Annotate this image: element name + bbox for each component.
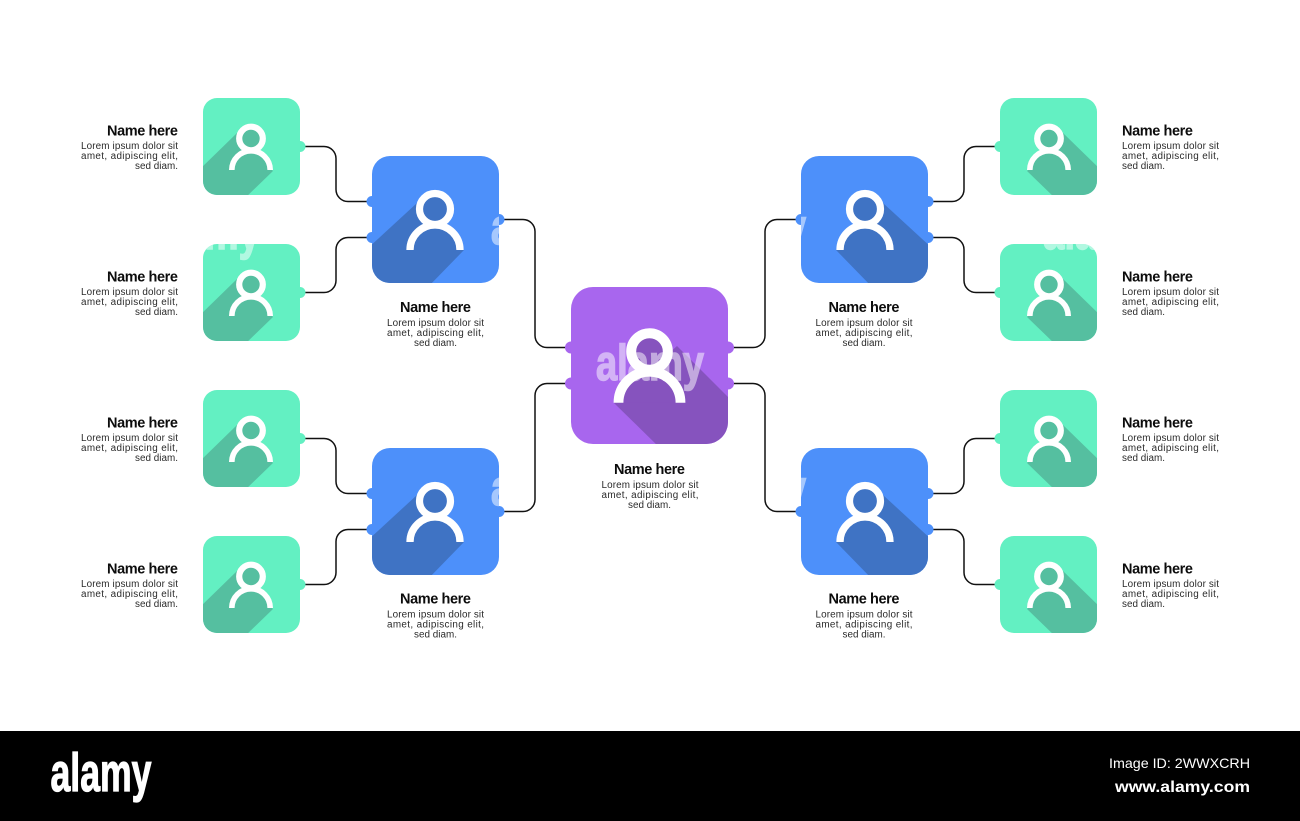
- text block: right 2: Lorem ipsum dolor sit: [1122, 287, 1219, 298]
- panel: left green box 1: [198, 98, 306, 200]
- text block: right blue top: amet, adipiscing elit,: [816, 328, 912, 339]
- text block: left 2: sed diam.: [135, 307, 178, 318]
- footer bar: [0, 731, 1300, 821]
- icon: person: [1030, 273, 1068, 316]
- watermark fragments: alamy: [1043, 204, 1152, 260]
- text block: left 3: Name here: [107, 416, 178, 432]
- text block: left 3: amet, adipiscing elit,: [81, 443, 178, 454]
- text block: left 2: [81, 270, 178, 318]
- text block: right 3: [1122, 416, 1219, 464]
- panel: right blue box top: [796, 156, 934, 288]
- icon: person: [840, 194, 890, 250]
- text block: left blue bottom: Name here: [400, 592, 471, 608]
- panel: left green box 2: [198, 244, 306, 346]
- text block: left 3: [81, 416, 178, 464]
- text block: center: Lorem ipsum dolor sit: [602, 480, 699, 491]
- text block: left 3: sed diam.: [135, 453, 178, 464]
- panel: left green box 3: [198, 390, 306, 492]
- text block: right 1: amet, adipiscing elit,: [1122, 151, 1219, 162]
- text block: right 4: [1122, 562, 1219, 610]
- text block: right 4: sed diam.: [1122, 599, 1165, 610]
- panel: right green box 1: [994, 98, 1102, 200]
- text block: right 1: Name here: [1122, 124, 1193, 140]
- panel: right green box 4: [994, 536, 1102, 638]
- text block: left 4: Lorem ipsum dolor sit: [81, 579, 178, 590]
- text block: right 1: [1122, 124, 1219, 172]
- text block: left 1: Name here: [107, 124, 178, 140]
- text block: right blue bottom: Name here: [828, 592, 900, 608]
- icon: person: [410, 194, 460, 250]
- text block: right 4: Name here: [1122, 562, 1193, 578]
- text block: left 4: sed diam.: [135, 599, 178, 610]
- text block: right blue bottom: sed diam.: [842, 630, 886, 640]
- text block: right blue top: sed diam.: [842, 338, 886, 349]
- text block: left 1: Lorem ipsum dolor sit: [81, 141, 178, 152]
- icon: person: [232, 419, 270, 462]
- image id: Image ID: 2WWXCRH: [1109, 755, 1250, 771]
- watermark fragments: alamy: [491, 460, 600, 516]
- panel: left blue box bottom: [366, 448, 504, 580]
- text block: left 2: Lorem ipsum dolor sit: [81, 287, 178, 298]
- text block: right 2: sed diam.: [1122, 307, 1165, 318]
- text block: left 4: [81, 562, 178, 610]
- text block: right 3: sed diam.: [1122, 453, 1165, 464]
- watermark fragments: alamy: [491, 199, 600, 255]
- watermark: alamy: [596, 335, 704, 391]
- panel: right blue box bottom: [796, 448, 934, 580]
- icon: person: [232, 127, 270, 170]
- watermark fragments: [206, 216, 1094, 506]
- text block: left blue bottom: amet, adipiscing elit,: [387, 620, 484, 630]
- text block: left blue bottom: sed diam.: [414, 630, 457, 640]
- icon: person: [1030, 419, 1068, 462]
- text block: left blue top: amet, adipiscing elit,: [387, 328, 484, 339]
- text block: center: [602, 462, 699, 511]
- icon: person: [1030, 127, 1068, 170]
- text block: right 3: Name here: [1122, 416, 1193, 432]
- text block: right 2: [1122, 270, 1219, 318]
- text block: left 1: sed diam.: [135, 161, 178, 172]
- text block: right 2: amet, adipiscing elit,: [1122, 297, 1219, 308]
- text block: left blue bottom: Lorem ipsum dolor sit: [387, 610, 484, 620]
- text block: right blue top: Lorem ipsum dolor sit: [816, 318, 913, 329]
- text block: right blue bottom: amet, adipiscing elit,: [816, 620, 912, 630]
- text block: left 3: Lorem ipsum dolor sit: [81, 433, 178, 444]
- text block: left blue top: Lorem ipsum dolor sit: [387, 318, 484, 329]
- text block: left 2: amet, adipiscing elit,: [81, 297, 178, 308]
- icon: person: [232, 273, 270, 316]
- logo: alamy: [50, 743, 152, 803]
- icon: person: [410, 486, 460, 542]
- watermark fragments: alamy: [151, 204, 260, 260]
- icon: person: [1030, 565, 1068, 608]
- text block: left 1: [81, 124, 178, 172]
- text block: right 1: Lorem ipsum dolor sit: [1122, 141, 1219, 152]
- text block: left blue top: sed diam.: [414, 338, 457, 349]
- watermark fragments: alamy: [697, 460, 806, 516]
- text block: left 4: amet, adipiscing elit,: [81, 589, 178, 600]
- text block: right blue bottom: Lorem ipsum dolor sit: [816, 610, 913, 620]
- text block: left blue top: [387, 300, 484, 349]
- text block: right 3: Lorem ipsum dolor sit: [1122, 433, 1219, 444]
- text block: left blue top: Name here: [400, 300, 471, 316]
- text block: center: amet, adipiscing elit,: [602, 490, 698, 501]
- icon: person: [232, 565, 270, 608]
- text block: left 4: Name here: [107, 562, 178, 578]
- text block: left blue bottom: [387, 592, 484, 640]
- panel: right green box 3: [994, 390, 1102, 492]
- text block: right blue top: [816, 300, 913, 349]
- text block: right blue bottom: [816, 592, 913, 640]
- text block: right 4: amet, adipiscing elit,: [1122, 589, 1219, 600]
- text block: right blue top: Name here: [828, 300, 900, 316]
- text block: right 1: sed diam.: [1122, 161, 1165, 172]
- panel: left green box 4: [198, 536, 306, 638]
- text block: left 2: Name here: [107, 270, 178, 286]
- icon: person: [618, 333, 680, 403]
- panel: right green box 2: [994, 244, 1102, 346]
- text block: right 3: amet, adipiscing elit,: [1122, 443, 1219, 454]
- text block: center: sed diam.: [628, 500, 671, 511]
- text block: left 1: amet, adipiscing elit,: [81, 151, 178, 162]
- panel: left blue box top: [366, 156, 504, 288]
- website: www.alamy.com: [1114, 779, 1250, 796]
- text block: right 4: Lorem ipsum dolor sit: [1122, 579, 1219, 590]
- text block: center: Name here: [614, 462, 685, 478]
- text block: right 2: Name here: [1122, 270, 1193, 286]
- icon: person: [840, 486, 890, 542]
- watermark fragments: alamy: [697, 199, 806, 255]
- connector lines: [304, 146, 996, 584]
- panel: central purple box: [565, 287, 734, 449]
